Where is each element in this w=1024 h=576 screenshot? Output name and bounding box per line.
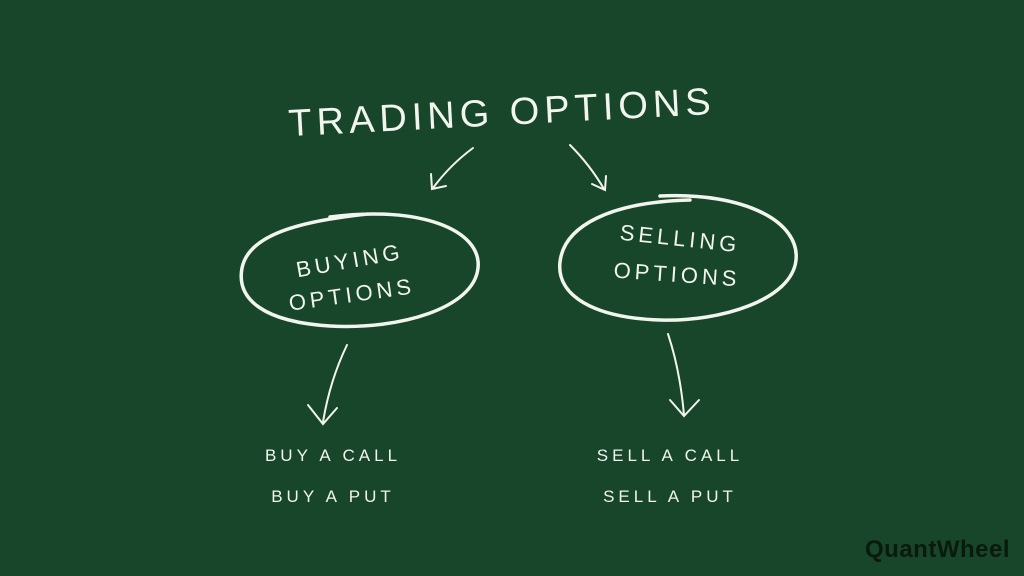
text: buying list bbox=[265, 446, 401, 506]
text: selling list bbox=[597, 446, 743, 506]
oval: buying options: OPTIONS bbox=[287, 273, 416, 316]
arrow: left from title bbox=[431, 148, 473, 189]
text: buying list: BUY A PUT bbox=[271, 487, 395, 506]
oval: buying options: BUYING bbox=[294, 239, 405, 282]
title: TRADING OPTIONS bbox=[287, 81, 717, 145]
logo: QuantWheel bbox=[865, 536, 1010, 563]
arrow: down from buying bbox=[308, 345, 347, 424]
arrow: right from title bbox=[570, 145, 606, 190]
oval: selling options bbox=[560, 196, 796, 320]
text: buying list: BUY A CALL bbox=[265, 446, 401, 465]
arrow: down from selling bbox=[668, 334, 699, 416]
oval: selling options: OPTIONS bbox=[613, 258, 741, 291]
text: selling list: SELL A CALL bbox=[597, 446, 743, 465]
oval: buying options bbox=[241, 214, 478, 326]
text: selling list: SELL A PUT bbox=[603, 487, 737, 506]
oval: selling options: SELLING bbox=[619, 220, 742, 257]
